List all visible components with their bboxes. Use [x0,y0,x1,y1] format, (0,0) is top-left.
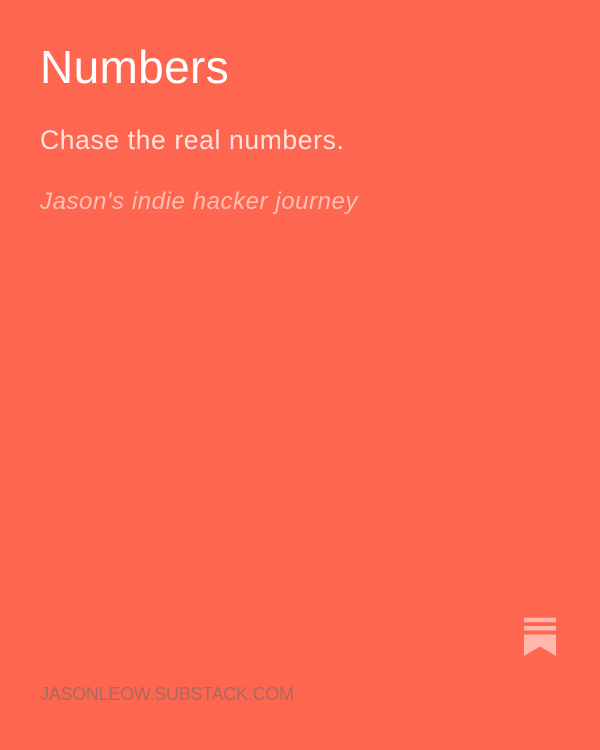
tagline: Jason's indie hacker journey [40,188,358,215]
title: Numbers [40,41,229,93]
subtitle: Chase the real numbers. [40,125,344,155]
footer url: JASONLEOW.SUBSTACK.COM [40,684,294,704]
icon: substack bookmark [524,618,556,656]
